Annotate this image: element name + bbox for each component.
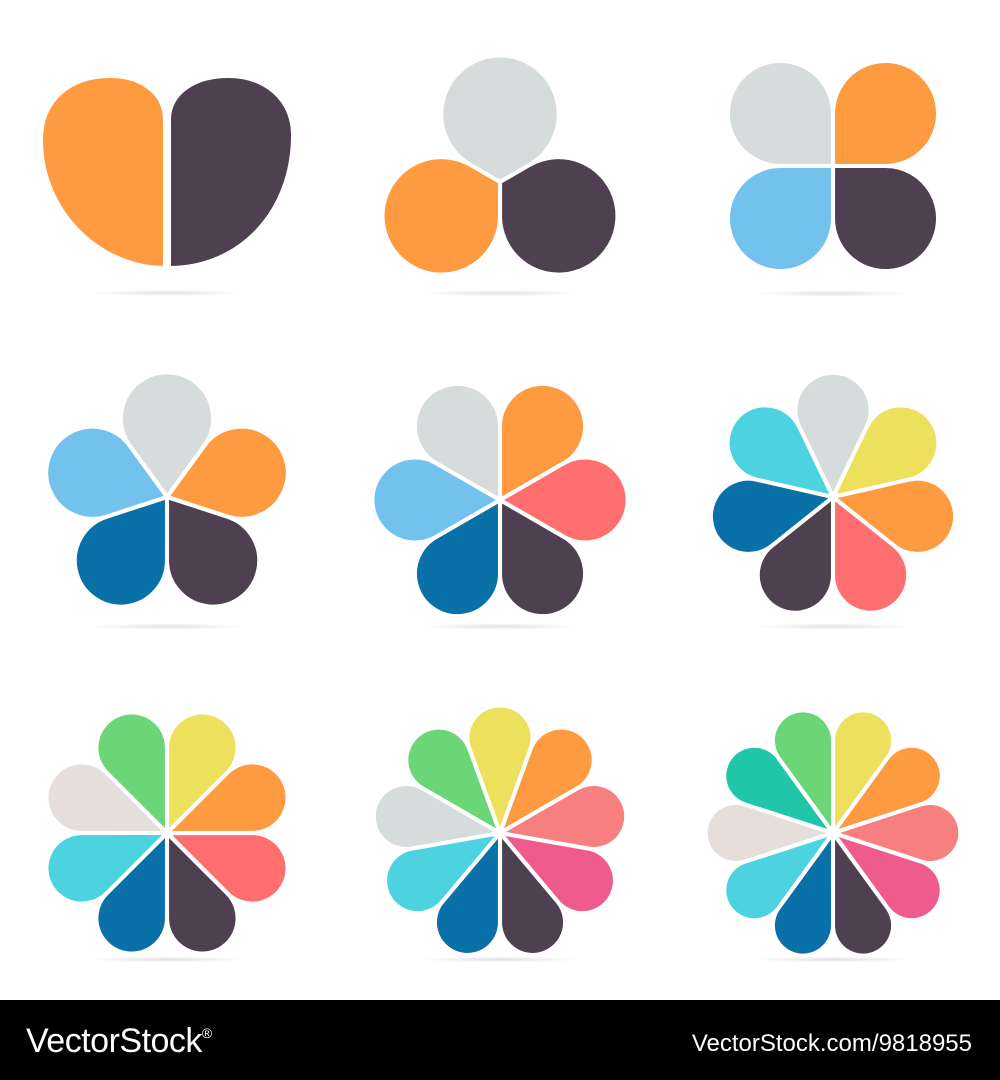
chart: 10 petals — [706, 703, 960, 963]
chart: 8 petals — [36, 702, 298, 964]
footer url: VectorStock.com/9818955 — [692, 1030, 972, 1057]
chart: 6 petals — [372, 368, 628, 632]
chart: 3 petals — [361, 55, 639, 296]
chart: 5 petals — [34, 372, 300, 630]
chart: 2-part heart — [41, 76, 293, 296]
chart: 7 petals — [703, 373, 963, 630]
footer logo text: ® — [202, 1025, 213, 1041]
chart: 4 petals — [706, 39, 960, 297]
footer bar — [0, 1000, 1000, 1080]
footer logo text: VectorStock — [26, 1022, 202, 1060]
chart: 9 petals — [369, 705, 631, 964]
